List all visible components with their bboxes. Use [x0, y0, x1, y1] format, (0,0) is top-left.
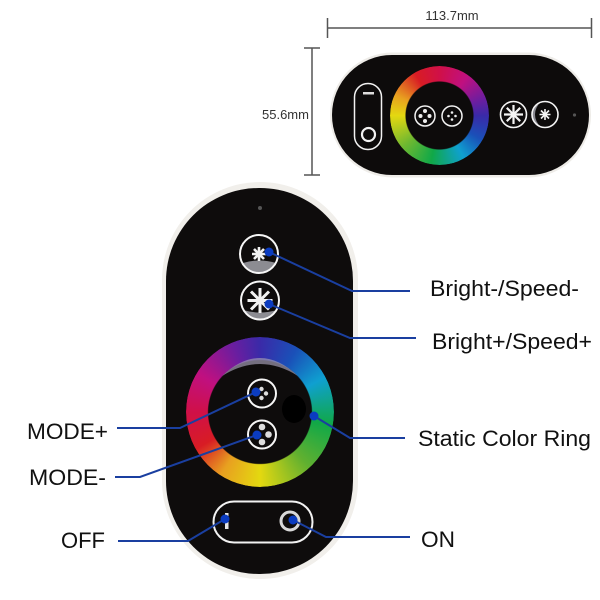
leader line: MODE+ [117, 388, 260, 428]
on/off pill [214, 502, 312, 542]
label: Static Color Ring: Static Color Ring [418, 426, 591, 451]
label: ON: ON [421, 527, 455, 552]
dimension: height [262, 48, 320, 175]
large remote LED [258, 206, 262, 210]
leader line: MODE- [115, 430, 262, 477]
leader line: Static Color Ring [310, 412, 405, 438]
button: bright plus [241, 282, 279, 321]
label: MODE+: MODE+ [27, 419, 108, 444]
button: mode minus [248, 420, 276, 448]
label: MODE-: MODE- [29, 465, 106, 490]
label: OFF: OFF [61, 528, 105, 553]
leader line: ON [288, 516, 410, 537]
small colour ring [390, 66, 489, 164]
dimension: width: 113.7mm [425, 8, 479, 23]
button: mode plus [248, 380, 276, 408]
label: Bright-/Speed-: Bright-/Speed- [430, 276, 579, 301]
small remote on/off pill [354, 84, 382, 150]
label: Bright+/Speed+: Bright+/Speed+ [432, 329, 592, 354]
leader line: Bright+ [264, 300, 416, 338]
small remote brightness buttons [500, 102, 558, 128]
ring inner highlight and dark spot [222, 358, 306, 423]
dimension: height: 55.6mm [262, 107, 309, 122]
leader line: OFF [118, 514, 230, 541]
button: bright minus [240, 235, 278, 273]
large colour ring [186, 337, 334, 487]
small remote mode buttons [415, 106, 462, 126]
dimension: width [328, 8, 592, 38]
leader line: Bright- [264, 248, 410, 291]
small remote LED [573, 113, 576, 117]
